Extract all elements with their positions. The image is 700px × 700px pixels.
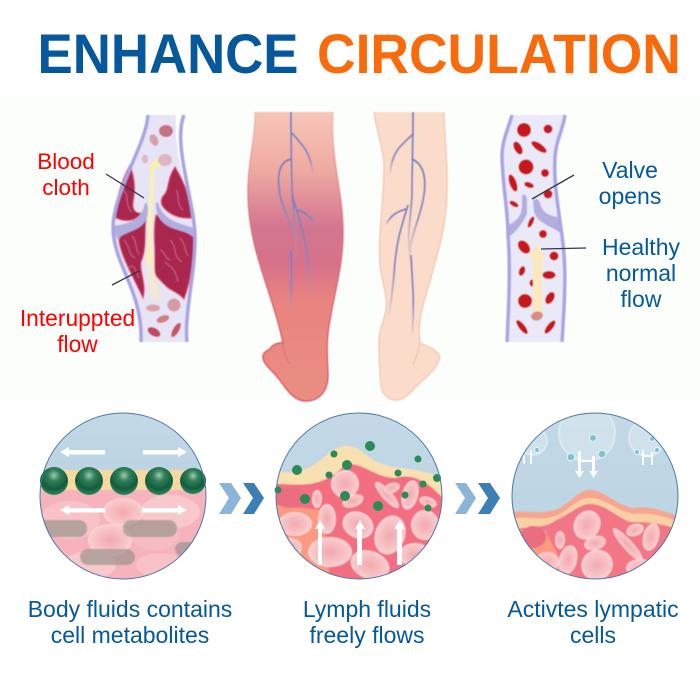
caption 3: cells (570, 622, 616, 648)
illustration: swollen leg (248, 112, 343, 401)
caption 3: Activtes lympatic (507, 596, 679, 622)
healthy flow arrow (528, 243, 546, 313)
illustration: healthy leg (374, 112, 447, 400)
faded and dark red cells (142, 125, 183, 339)
yellow flow arrow (148, 157, 161, 300)
pointer: blood cloth (106, 174, 144, 198)
vein walls (502, 115, 565, 342)
white down arrows (523, 450, 653, 478)
vein interior (502, 115, 565, 342)
pointer: healthy flow (541, 248, 586, 249)
swollen leg outline (248, 112, 343, 401)
bubbles (524, 414, 662, 461)
label: Healthy normal flow: Healthy (602, 234, 680, 260)
label: Interuppted flow: flow (57, 331, 98, 357)
title (38, 22, 681, 85)
red cells (507, 123, 558, 336)
green spheres (40, 467, 206, 495)
caption 1 (28, 596, 232, 648)
white arrows (60, 447, 187, 515)
circle 1: body fluids (35, 413, 206, 580)
caption 1: Body fluids contains (28, 596, 232, 622)
vein walls (113, 115, 195, 342)
healthy leg fill (374, 112, 447, 400)
veins (279, 112, 316, 315)
healthy leg outline (374, 112, 447, 400)
blood clot mass (116, 165, 194, 299)
label: Healthy normal flow: flow (621, 286, 662, 312)
caption 3 (507, 596, 679, 648)
cells (40, 495, 200, 579)
label: Valve opens: opens (599, 183, 661, 209)
chevrons 2 (455, 483, 500, 514)
caption 2: Lymph fluids (303, 596, 431, 622)
diagram: blocked vein (113, 115, 195, 342)
swollen leg fill (248, 112, 343, 401)
clot texture (123, 190, 188, 282)
diagram: healthy vein (502, 115, 565, 342)
cells (275, 465, 439, 585)
chevrons 1 (219, 483, 264, 514)
grey metabolites (44, 520, 192, 566)
label: Valve opens: Valve (602, 157, 658, 183)
title: CIRCULATION (317, 22, 681, 85)
valve flaps (506, 194, 562, 236)
pointer: interrupted flow (112, 271, 139, 285)
label: Interuppted flow: Interuppted (20, 305, 135, 331)
label: Blood cloth: cloth (42, 175, 90, 200)
white up arrows (315, 520, 405, 565)
label: Interuppted flow (20, 305, 135, 357)
title: ENHANCE (38, 23, 299, 85)
label: Blood cloth: Blood (37, 149, 95, 174)
pointer: valve opens (532, 175, 574, 199)
caption 2 (303, 596, 431, 648)
green dots (274, 441, 441, 512)
cells (521, 510, 660, 578)
droplets (534, 434, 660, 461)
caption 1: cell metabolites (51, 622, 209, 648)
valve flaps (113, 202, 195, 240)
label: Valve opens (599, 157, 661, 209)
caption 2: freely flows (309, 622, 425, 648)
label: Healthy normal flow: normal (606, 260, 676, 286)
label: Blood cloth (37, 149, 95, 200)
label: Healthy normal flow (602, 234, 680, 312)
veins (386, 112, 425, 335)
circle 3: activates cells (512, 405, 678, 586)
vein interior (113, 115, 195, 342)
circle 2: lymph flows (274, 413, 442, 585)
